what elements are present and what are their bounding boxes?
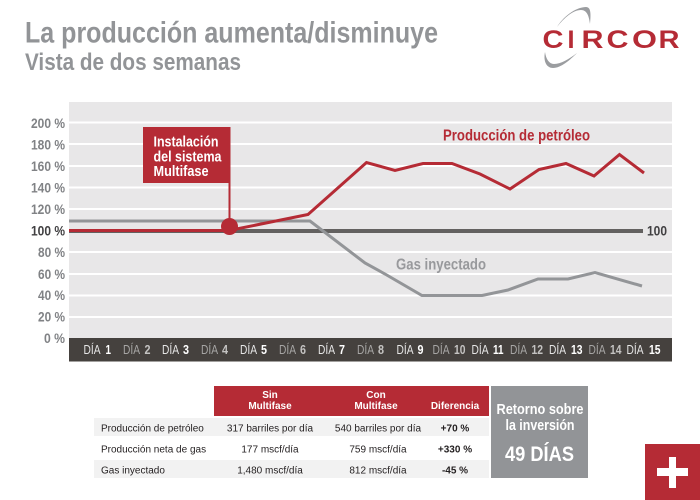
table: -45 % — [442, 466, 468, 476]
x axis band: DÍA — [626, 342, 644, 357]
icon: plus button — [645, 444, 700, 500]
table: Producción de petróleo — [101, 424, 204, 434]
table: +330 % — [438, 444, 472, 456]
x axis band: 11 — [493, 342, 504, 357]
logo: CIRCOR — [542, 7, 680, 68]
callout: instalación — [143, 127, 238, 235]
x axis band — [69, 338, 672, 362]
callout: instalación: Instalación — [154, 134, 218, 150]
x axis band: 9 — [418, 342, 424, 357]
x axis band: DÍA — [588, 342, 606, 357]
table: 540 barriles por día — [335, 424, 422, 434]
x axis band: 14 — [610, 342, 622, 357]
x axis band: 15 — [649, 342, 660, 357]
label: gas inyectado: Gas inyectado — [396, 256, 486, 274]
logo: CIRCOR: R — [582, 26, 604, 54]
logo: CIRCOR: C — [542, 26, 564, 54]
title: La producción aumenta/disminuye — [25, 16, 438, 50]
subtitle: Vista de dos semanas — [25, 49, 241, 76]
x axis band: DÍA — [432, 342, 450, 357]
y axis labels — [31, 115, 65, 346]
panel: retorno sobre la inversión — [491, 386, 588, 478]
x axis band: DÍA — [396, 342, 414, 357]
table: Multifase — [248, 401, 292, 412]
x axis band: DÍA — [84, 342, 101, 357]
logo: CIRCOR: O — [632, 26, 657, 54]
y axis labels: 120 % — [31, 201, 65, 217]
table: Diferencia — [431, 401, 480, 412]
panel: retorno sobre la inversión: 49 DÍAS — [505, 443, 574, 466]
x axis band: 6 — [300, 342, 306, 357]
x axis band: DÍA — [123, 342, 140, 357]
x axis band: 3 — [183, 342, 189, 357]
table: +70 % — [441, 424, 469, 434]
y axis labels: 20 % — [38, 308, 65, 324]
x axis band: 2 — [144, 342, 150, 357]
y axis labels: 160 % — [31, 158, 65, 174]
table: 759 mscf/día — [349, 444, 407, 456]
x axis band: 12 — [532, 342, 543, 357]
table: Producción neta de gas — [101, 444, 206, 456]
y axis labels: 40 % — [38, 287, 65, 303]
label: producción de petróleo: Producción de petróleo — [443, 128, 590, 144]
x axis band: DÍA — [510, 342, 527, 357]
callout: instalación: Multifase — [154, 163, 208, 180]
x axis band: 4 — [222, 342, 229, 357]
table: Con — [366, 390, 386, 401]
table: Sin — [262, 390, 278, 401]
logo: CIRCOR: C — [606, 26, 628, 54]
x axis band: 5 — [261, 342, 267, 357]
table: 1,480 mscf/día — [237, 466, 303, 476]
table: Multifase — [354, 401, 398, 412]
x axis band: DÍA — [318, 342, 335, 357]
panel: chart background — [69, 102, 672, 338]
logo: CIRCOR: I — [568, 26, 574, 54]
table: Gas inyectado — [101, 466, 165, 476]
x axis band: 13 — [571, 342, 582, 357]
logo: CIRCOR: R — [658, 26, 680, 54]
y axis labels: 60 % — [38, 266, 65, 282]
x axis band: 1 — [106, 342, 111, 357]
panel: retorno sobre la inversión: la inversión — [506, 417, 574, 434]
callout: instalación: del sistema — [154, 148, 222, 166]
x axis band: DÍA — [201, 342, 218, 357]
x axis band: DÍA — [162, 342, 179, 357]
x axis band: DÍA — [357, 342, 374, 357]
x axis band: DÍA — [279, 342, 296, 357]
y axis labels: 80 % — [38, 244, 65, 260]
table — [94, 386, 489, 478]
panel: retorno sobre la inversión: Retorno sobre — [496, 401, 584, 418]
y axis labels: 180 % — [31, 136, 65, 152]
x axis band: 8 — [378, 342, 384, 357]
x axis band: DÍA — [240, 342, 257, 357]
y axis labels: 140 % — [31, 180, 65, 196]
y axis labels: 0 % — [44, 330, 65, 346]
y axis labels: 100 % — [31, 222, 65, 238]
line: gas inyectado — [69, 221, 642, 296]
baseline label: 100 — [647, 222, 667, 238]
x axis band: DÍA — [472, 342, 489, 357]
table: 812 mscf/día — [349, 466, 407, 476]
x axis band: 7 — [339, 342, 345, 357]
y axis labels: 200 % — [31, 115, 65, 131]
table: 177 mscf/día — [241, 444, 299, 456]
baseline 100 line — [69, 229, 643, 233]
line: producción de petróleo — [69, 154, 644, 230]
table: 317 barriles por día — [227, 424, 314, 434]
x axis band: DÍA — [549, 342, 566, 357]
x axis band: 10 — [454, 342, 466, 357]
